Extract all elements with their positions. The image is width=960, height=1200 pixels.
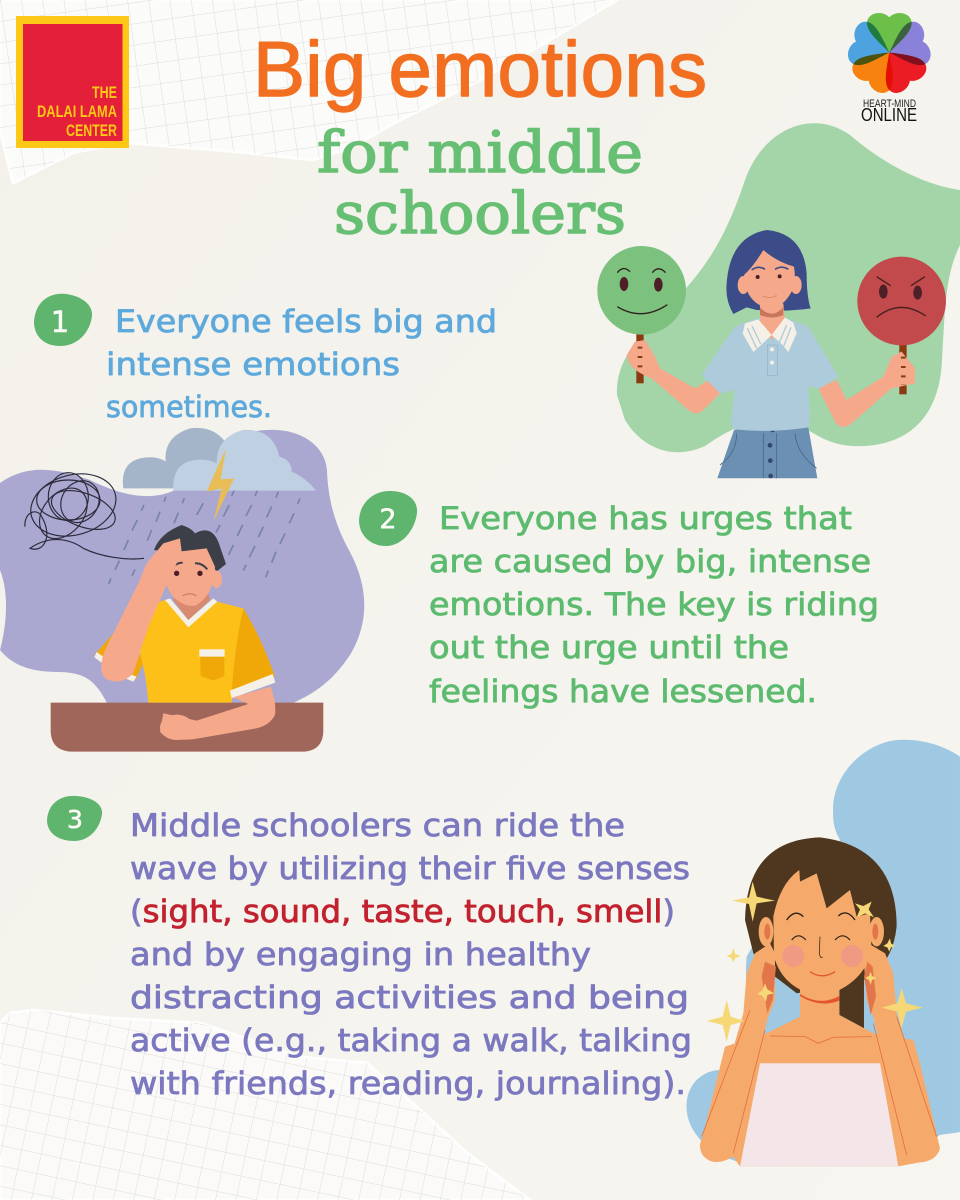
face (738, 276, 749, 294)
subtitle: schoolers (334, 181, 626, 247)
subtitle (317, 120, 643, 247)
angry face sign (857, 257, 946, 345)
text block 1: sometimes. (106, 390, 272, 424)
text block 2 (429, 501, 879, 710)
torn grid paper: top left (0, 0, 617, 183)
text block 3: active (e.g., taking a walk, talking (130, 1023, 692, 1059)
title: Big emotions (253, 25, 707, 113)
green blob (617, 123, 960, 452)
logo: Heart-Mind Online: ONLINE (861, 105, 917, 125)
text block 1: Everyone feels big and (115, 304, 497, 340)
text block 3: wave by utilizing their five senses (130, 851, 690, 887)
hair back (726, 230, 811, 314)
text block 1 (106, 304, 497, 424)
illustration: stressed boy under storm cloud (0, 428, 364, 752)
happy face sign (597, 246, 686, 335)
lightning bolt (207, 448, 234, 522)
shirt (702, 318, 838, 431)
head (211, 571, 222, 588)
text block 2: out the urge until the (429, 630, 789, 666)
neck (760, 303, 785, 340)
logo: Heart-Mind Online: HEART-MIND (863, 98, 916, 110)
neck and collar (165, 598, 217, 627)
number badge 3: 3 (67, 805, 83, 834)
right arm on the table (160, 687, 275, 740)
body (700, 987, 940, 1167)
raised arm and hand (101, 538, 182, 682)
right sign stick (899, 343, 907, 394)
text block 2: Everyone has urges that (439, 501, 852, 537)
text block 3: with friends, reading, journaling). (130, 1066, 686, 1102)
text block 3: and by engaging in healthy (130, 937, 591, 973)
table (51, 703, 323, 752)
number badge 2: 2 (379, 504, 397, 535)
top (740, 1063, 898, 1167)
skirt (717, 426, 817, 478)
blue blobs (687, 740, 960, 1163)
logo: The Dalai Lama Center: DALAI LAMA (37, 102, 117, 121)
back hair (745, 837, 897, 1028)
pocket (200, 650, 224, 681)
left sign stick (636, 333, 644, 383)
text block 2: are caused by big, intense (429, 544, 871, 580)
number badge 3 (47, 796, 102, 841)
number badge 2 (359, 491, 417, 546)
text block 1: intense emotions (106, 347, 400, 383)
sparkles (707, 882, 923, 1042)
text block 3: Middle schoolers can ride the (130, 808, 625, 844)
shirt (133, 600, 243, 703)
hair (154, 525, 226, 572)
subtitle: for middle (317, 120, 643, 186)
text block 3: distracting activities and being (130, 980, 689, 1016)
face (773, 870, 872, 997)
lavender blob (0, 430, 364, 703)
number badge 1: 1 (51, 305, 69, 339)
right sleeve (232, 608, 275, 697)
left sleeve (94, 630, 143, 681)
logo: The Dalai Lama Center: CENTER (66, 121, 117, 140)
hands and forearms (703, 943, 775, 1152)
scribble (24, 465, 144, 559)
text block 3: (sight, sound, taste, touch, smell ) (130, 894, 675, 930)
rain (109, 491, 300, 584)
logo: The Dalai Lama Center: THE (92, 83, 117, 102)
text block 2: emotions. The key is riding (429, 587, 879, 623)
torn grid paper: bottom left (0, 1010, 530, 1200)
text block 2: feelings have lessened. (429, 674, 817, 710)
illustration: woman holding emotion signs (597, 123, 960, 478)
storm clouds (123, 428, 316, 491)
text block 3 (130, 808, 692, 1102)
logo: The Dalai Lama Center (16, 16, 129, 148)
logo: Heart-Mind Online (845, 13, 934, 125)
illustration: smiling woman touching her face (687, 740, 960, 1167)
number badge 1 (34, 294, 92, 346)
arms and hands (627, 340, 722, 413)
collar (743, 317, 797, 352)
